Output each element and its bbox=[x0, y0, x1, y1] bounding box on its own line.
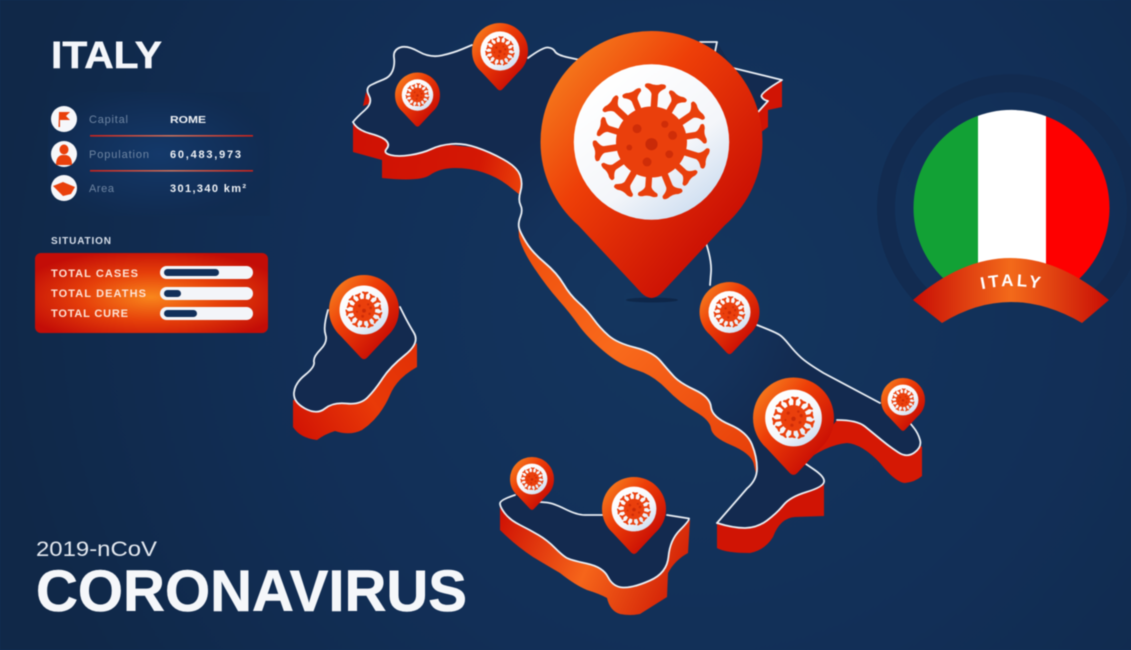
ribbon label bbox=[930, 286, 1094, 310]
panel: situation bbox=[35, 253, 268, 333]
Sardinia coastline bbox=[294, 307, 416, 412]
icon: area map bbox=[51, 175, 77, 201]
area row: 301,340 km² bbox=[170, 183, 246, 195]
main heading: CORONAVIRUS bbox=[36, 559, 467, 624]
map: Sicily bbox=[500, 495, 690, 615]
Sicily side wall bbox=[500, 503, 690, 615]
pin: west Sicily bbox=[510, 457, 554, 510]
Sicily land fill bbox=[500, 495, 689, 588]
flag ribbon bbox=[913, 258, 1109, 323]
mainland land fill bbox=[353, 33, 920, 528]
map: Italy mainland bbox=[353, 33, 922, 553]
mainland side wall: north-east bbox=[757, 80, 782, 133]
pin: Campania bbox=[753, 378, 834, 475]
capital row: Capital bbox=[89, 114, 128, 126]
area row bbox=[89, 183, 246, 195]
area row: Area bbox=[89, 183, 115, 195]
capital row: ROME bbox=[170, 114, 206, 126]
situation heading: SITUATION bbox=[51, 236, 111, 247]
flag badge bbox=[878, 99, 1110, 324]
icon: capital flag bbox=[51, 106, 77, 132]
mainland coastline bbox=[353, 42, 920, 528]
population row: Population bbox=[89, 149, 149, 161]
total cure row bbox=[51, 307, 253, 320]
pin: central Italy, large bbox=[540, 31, 762, 298]
subtitle: 2019-nCoV bbox=[36, 538, 157, 561]
total cure row: TOTAL CURE bbox=[51, 308, 128, 320]
flag circle bbox=[912, 109, 1110, 280]
total deaths row: TOTAL DEATHS bbox=[51, 288, 146, 300]
Sardinia side wall bbox=[293, 343, 417, 440]
title: ITALY bbox=[51, 35, 162, 77]
map: Sardinia bbox=[293, 307, 417, 440]
Sicily coastline bbox=[500, 495, 689, 588]
mainland side wall: west coast bbox=[518, 222, 775, 478]
capital row bbox=[89, 114, 206, 126]
pin: Apulia bbox=[881, 378, 925, 431]
mainland side wall: Calabria bbox=[717, 478, 824, 553]
big pin shadow bbox=[626, 298, 678, 302]
facts background bbox=[48, 92, 270, 216]
mainland side wall: small northern coast bit bbox=[363, 92, 372, 106]
total deaths row bbox=[51, 287, 253, 300]
mainland side wall: north bbox=[353, 122, 525, 195]
pin: Sardinia bbox=[329, 275, 399, 359]
pin: east Sicily bbox=[602, 477, 666, 554]
pin: Adriatic coast bbox=[700, 282, 760, 354]
population row bbox=[89, 149, 241, 161]
panel: country facts bbox=[48, 92, 270, 216]
total cases row: TOTAL CASES bbox=[51, 268, 138, 280]
pin: north bbox=[472, 23, 528, 90]
icon: population person bbox=[51, 141, 77, 167]
mainland side wall: Apulia bbox=[800, 410, 922, 483]
population row: 60,483,973 bbox=[170, 149, 241, 161]
pin: north-west bbox=[395, 72, 440, 127]
flag outer ring bbox=[886, 83, 1131, 295]
Sardinia land fill bbox=[294, 307, 416, 412]
situation background bbox=[35, 253, 268, 333]
total cases row bbox=[51, 266, 253, 280]
flag badge: ITALY bbox=[980, 274, 1042, 290]
